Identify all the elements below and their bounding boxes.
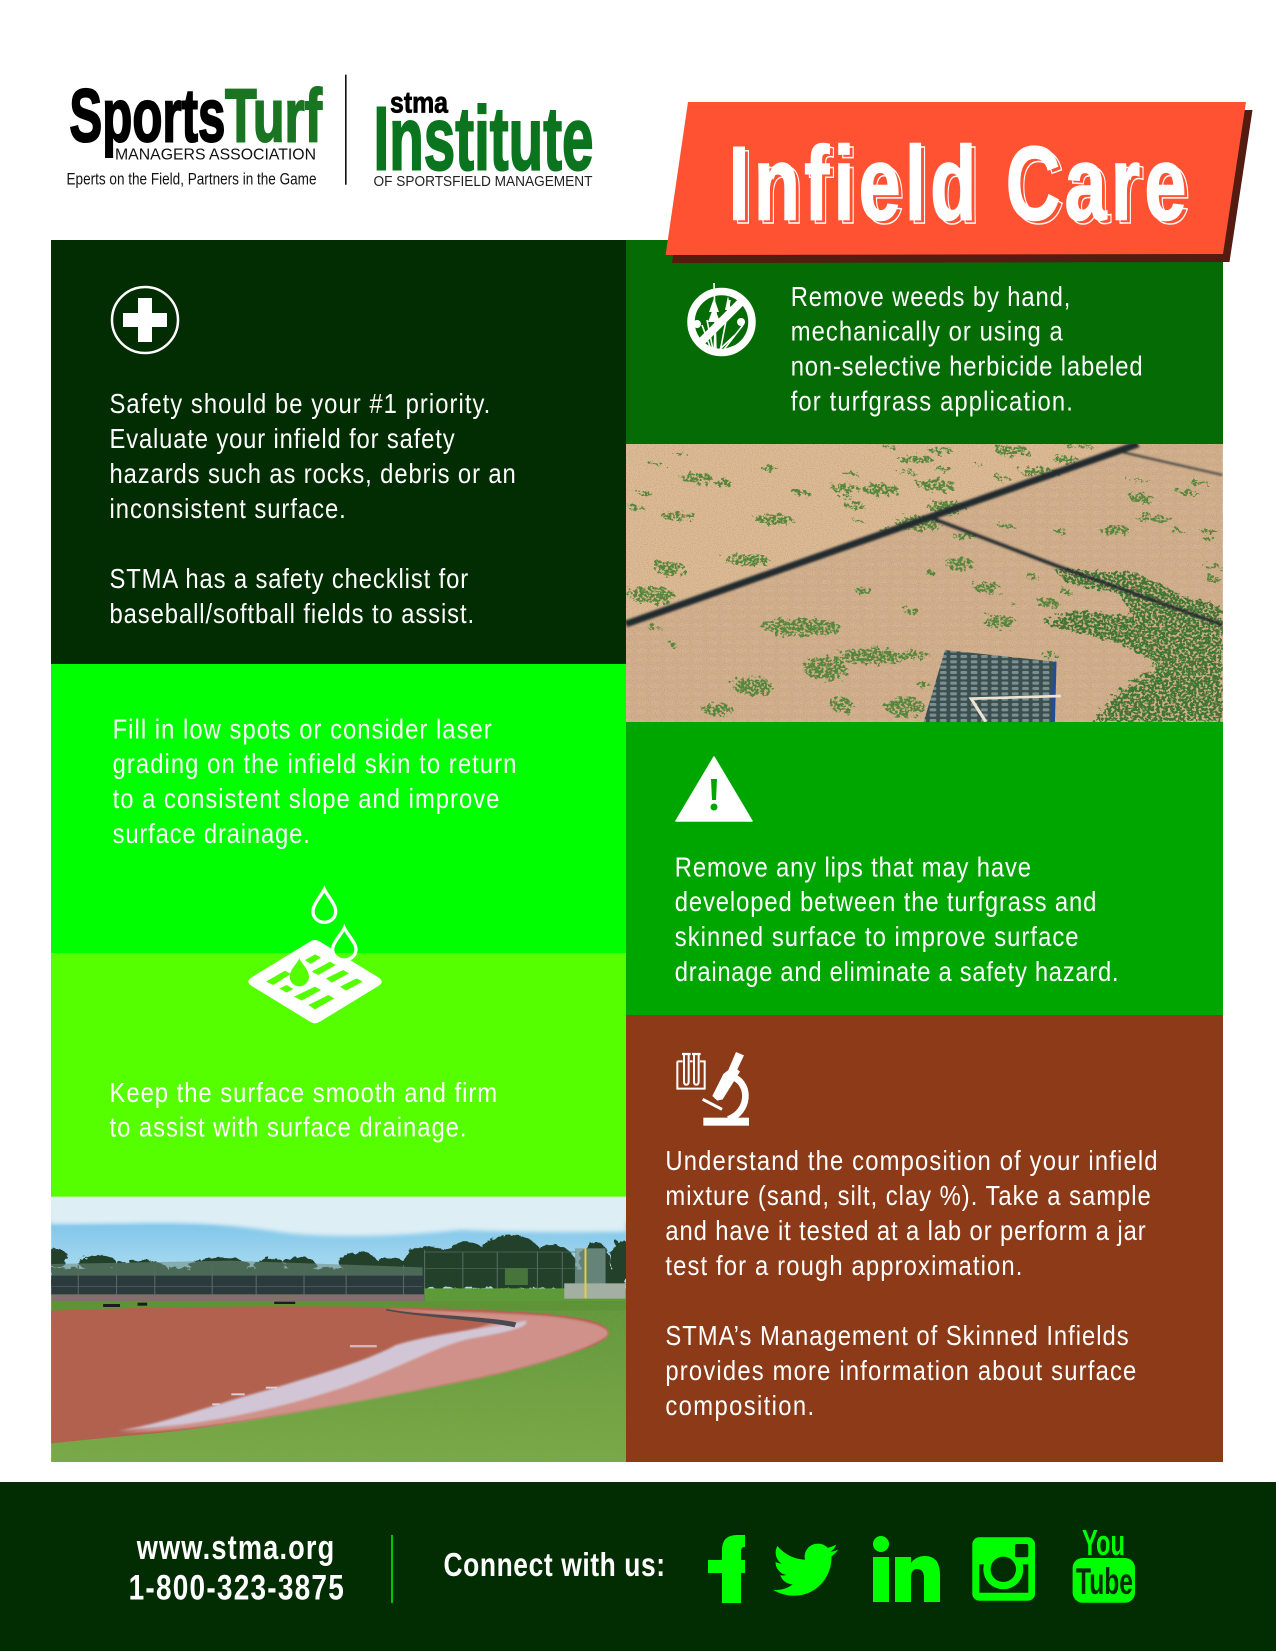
text: composition: Understand the composition of your infield xyxy=(665,1144,1158,1176)
text: remove lips: skinned surface to improve surface xyxy=(675,920,1079,952)
icon: youtube: You xyxy=(1082,1522,1125,1563)
photo: weeds on infield skin xyxy=(626,444,1223,722)
text: safety xyxy=(110,387,516,629)
icon: drain grate with water drops xyxy=(248,889,382,1023)
panel: low spots xyxy=(51,664,626,953)
icon: warning triangle xyxy=(676,757,752,821)
icon: youtube: Tube xyxy=(1076,1561,1133,1602)
title banner: Infield Care: Infield Care xyxy=(732,129,1190,246)
header logo: SportsTurf Managers Association: Turf xyxy=(225,74,323,158)
text: safety: Evaluate your infield for safety xyxy=(110,422,455,454)
text: smooth surface: Keep the surface smooth and firm xyxy=(110,1076,497,1108)
header logo: STMA Institute: stma xyxy=(390,87,448,120)
text: safety: inconsistent surface. xyxy=(110,492,346,524)
footer contact details xyxy=(129,1528,344,1607)
panel: remove weeds xyxy=(626,240,1223,444)
text: low spots: Fill in low spots or consider laser xyxy=(113,713,492,745)
header logo: STMA Institute: Institute xyxy=(374,89,594,189)
icon: twitter xyxy=(773,1544,838,1596)
text: safety: Safety should be your #1 priority. xyxy=(110,387,490,419)
text: composition: test for a rough approximation. xyxy=(665,1249,1022,1281)
header logo: SportsTurf Managers Association xyxy=(66,74,323,188)
header logo: SportsTurf Managers Association: Eperts on the Field, Partners in the Game xyxy=(66,169,316,188)
text: remove weeds: for turfgrass application. xyxy=(791,385,1073,417)
text: remove weeds: mechanically or using a xyxy=(791,315,1063,347)
icon: linkedin xyxy=(873,1536,940,1602)
icon: instagram xyxy=(972,1537,1035,1601)
header logo: SportsTurf Managers Association: Sports xyxy=(69,74,225,158)
icon: facebook xyxy=(708,1535,745,1603)
icon: no weeds xyxy=(691,283,752,352)
text: low spots xyxy=(113,713,516,849)
icon: test tubes and microscope xyxy=(677,1052,749,1126)
panel: remove lips xyxy=(626,722,1223,1015)
text: remove lips: developed between the turfgrass and xyxy=(675,885,1096,917)
header logo: STMA Institute xyxy=(374,87,594,190)
footer bar xyxy=(0,1482,1276,1651)
panel: smooth surface xyxy=(51,953,626,1197)
panel: composition xyxy=(626,1015,1223,1462)
text: safety: baseball/softball fields to assist. xyxy=(110,597,474,629)
text: composition: mixture (sand, silt, clay %). Take a sample xyxy=(665,1179,1151,1211)
text: low spots: grading on the infield skin to return xyxy=(113,747,516,779)
text: smooth surface xyxy=(110,1076,497,1143)
text: composition xyxy=(665,1144,1158,1421)
text: remove lips xyxy=(675,851,1118,987)
header divider xyxy=(345,75,347,185)
footer contact details: 1-800-323-3875 xyxy=(129,1567,344,1607)
text: low spots: to a consistent slope and improve xyxy=(113,782,499,814)
panel: safety priority xyxy=(51,240,626,664)
text: remove weeds: non-selective herbicide labeled xyxy=(791,350,1143,382)
photo: flooded infield xyxy=(47,1197,633,1462)
header logo: STMA Institute: OF SPORTSFIELD MANAGEMENT xyxy=(374,174,593,190)
icon: medical cross xyxy=(112,287,178,353)
text: remove weeds: Remove weeds by hand, xyxy=(791,280,1070,312)
text: composition: provides more information about surface xyxy=(665,1354,1136,1386)
text: low spots: surface drainage. xyxy=(113,817,310,849)
connect heading: Connect with us: xyxy=(444,1547,665,1584)
text: remove lips: drainage and eliminate a safety hazard. xyxy=(675,955,1119,987)
text: composition: and have it tested at a lab or perform a jar xyxy=(665,1214,1146,1246)
text: composition: composition. xyxy=(665,1389,814,1421)
text: remove lips: Remove any lips that may have xyxy=(675,851,1031,883)
text: smooth surface: to assist with surface drainage. xyxy=(110,1111,467,1143)
footer divider xyxy=(391,1535,393,1603)
icon: youtube xyxy=(1073,1522,1135,1603)
text: safety: hazards such as rocks, debris or an xyxy=(110,457,516,489)
header logo: SportsTurf Managers Association: MANAGERS ASSOCIATION xyxy=(115,146,316,163)
title banner: Infield Care: Infield Care xyxy=(728,125,1186,242)
text: safety: STMA has a safety checklist for xyxy=(110,562,469,594)
title banner: Infield Care xyxy=(666,102,1252,263)
text: remove weeds xyxy=(791,280,1143,417)
text: composition: STMA’s Management of Skinned Infields xyxy=(665,1319,1129,1351)
footer contact details: www.stma.org xyxy=(136,1528,334,1567)
